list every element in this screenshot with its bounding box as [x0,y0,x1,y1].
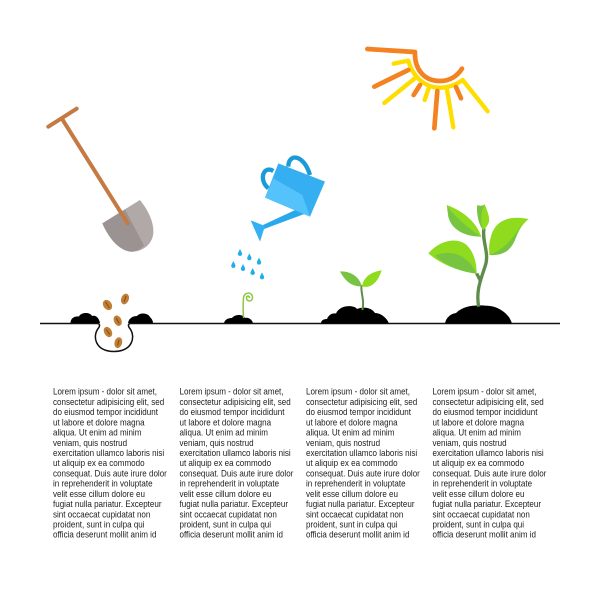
text column 4: consequat. Duis aute irure dolor [432,468,546,479]
text column 4: Lorem ipsum - dolor sit amet, [432,386,537,397]
text column 1: officia deserunt mollit anim id [53,529,157,540]
text column 2: sint occaecat cupidatat non [180,509,277,519]
text column 2: ut labore et dolore magna [180,417,271,427]
soil mounds [70,305,512,324]
text column 4: velit esse cillum dolore eu [432,488,525,499]
text column 3: ut aliquip ex ea commodo [306,458,398,468]
ground line with seed hole [40,324,560,352]
text column 2: Lorem ipsum - dolor sit amet, [180,386,284,397]
text column 1: sint occaecat cupidatat non [53,509,151,519]
text column 2: aliqua. Ut enim ad minim [180,427,268,438]
can handles [263,158,310,188]
text column 1: exercitation ullamco laboris nisi [53,447,164,458]
water drops [231,249,264,279]
text column 2: velit esse cillum dolore eu [180,488,272,499]
text column 4: proident, sunt in culpa qui [432,519,524,530]
text column 1: fugiat nulla pariatur. Excepteur [53,499,162,509]
text column 4: ut labore et dolore magna [432,417,524,427]
text column 2: in reprehenderit in voluptate [180,478,279,489]
shovel [48,109,153,252]
text column 1: velit esse cillum dolore eu [53,488,145,499]
shovel blade [102,200,153,252]
watering can [251,158,325,242]
seeds [101,293,130,349]
leaves [428,240,477,274]
text column 1: aliqua. Ut enim ad minim [53,427,141,438]
text column 2: proident, sunt in culpa qui [180,519,271,530]
text column 2: consequat. Duis aute irure dolor [180,468,293,479]
text column 4: do eiusmod tempor incididunt [432,407,538,417]
text column 2: consectetur adipisicing elit, sed [180,396,291,407]
can spout [262,209,306,229]
shovel handle [48,109,128,223]
large plant [428,204,529,307]
text column 1: ut aliquip ex ea commodo [53,458,145,468]
text column 2: ut aliquip ex ea commodo [180,458,271,468]
text column 4: consectetur adipisicing elit, sed [432,396,544,407]
stem [477,228,487,307]
text column 2: veniam, quis nostrud [180,437,254,448]
text column 4: fugiat nulla pariatur. Excepteur [432,499,541,509]
can body [265,163,325,217]
text column 3: in reprehenderit in voluptate [306,478,406,489]
text column 3: sint occaecat cupidatat non [306,509,404,519]
text column 4: in reprehenderit in voluptate [432,478,532,489]
text column 3: proident, sunt in culpa qui [306,519,398,530]
text column 2: fugiat nulla pariatur. Excepteur [180,499,288,509]
text column 1: proident, sunt in culpa qui [53,519,145,530]
text column 3: do eiusmod tempor incididunt [306,407,411,417]
text column 3: consectetur adipisicing elit, sed [306,396,417,407]
text column 3: fugiat nulla pariatur. Excepteur [306,499,415,509]
seedling [340,270,382,310]
sun [367,49,488,128]
text column 1: Lorem ipsum - dolor sit amet, [53,386,157,397]
text column 2: exercitation ullamco laboris nisi [180,447,291,458]
text column 3: Lorem ipsum - dolor sit amet, [306,386,410,397]
text column 1: in reprehenderit in voluptate [53,478,153,489]
text column 2: officia deserunt mollit anim id [180,529,283,540]
text column 4: ut aliquip ex ea commodo [432,458,524,468]
text column 3: ut labore et dolore magna [306,417,398,427]
text column 1: do eiusmod tempor incididunt [53,407,158,417]
text column 3: veniam, quis nostrud [306,437,380,448]
text column 3: officia deserunt mollit anim id [306,529,410,540]
text column 3: consequat. Duis aute irure dolor [306,468,420,479]
text column 3: aliqua. Ut enim ad minim [306,427,394,438]
text column 4: aliqua. Ut enim ad minim [432,427,521,438]
text column 4: exercitation ullamco laboris nisi [432,447,544,458]
text column 1: ut labore et dolore magna [53,417,145,427]
text column 1: consequat. Duis aute irure dolor [53,468,167,479]
text column 4: sint occaecat cupidatat non [432,509,530,519]
text column 1: consectetur adipisicing elit, sed [53,396,164,407]
text column 3: velit esse cillum dolore eu [306,488,398,499]
sprout [243,293,252,318]
text column 1: veniam, quis nostrud [53,437,127,448]
text column 2: do eiusmod tempor incididunt [180,407,285,417]
text column 3: exercitation ullamco laboris nisi [306,447,417,458]
text column 4: veniam, quis nostrud [432,437,507,448]
text column 4: officia deserunt mollit anim id [432,529,536,540]
